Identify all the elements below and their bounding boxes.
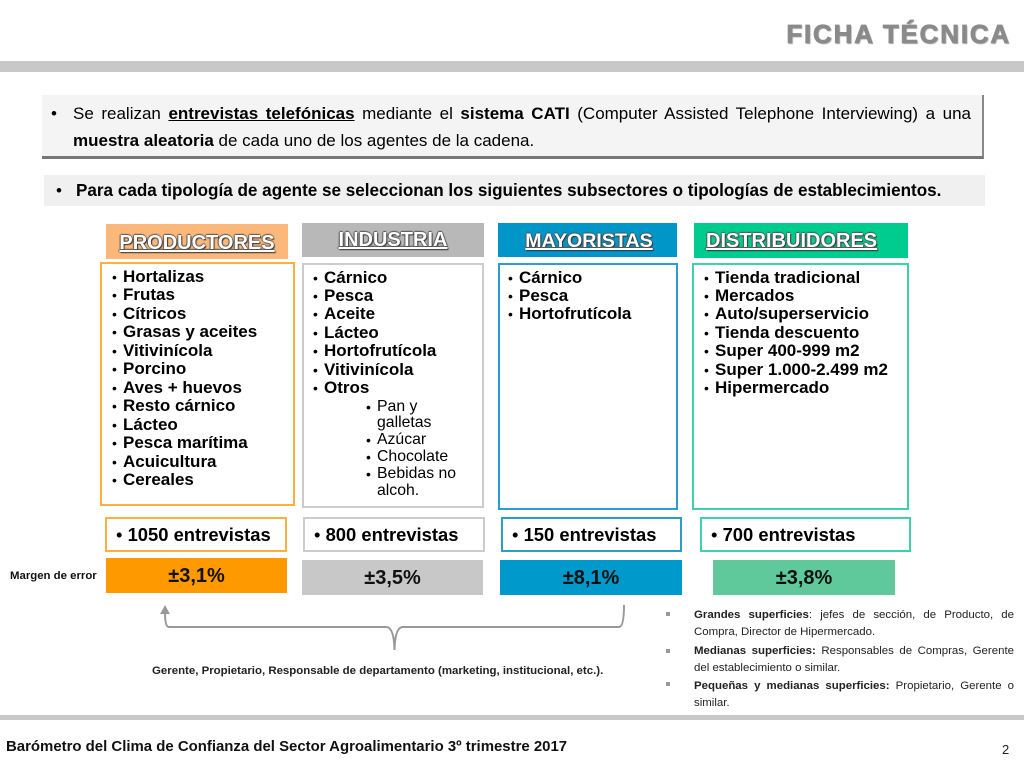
margin: mayoristas: ±8,1% <box>563 567 619 589</box>
note text: Para cada tipología de agente se seleccionan los siguientes subsectores o tipologías de establecimientos. <box>76 181 941 200</box>
heading: mayoristas <box>498 223 677 257</box>
list: Tienda descuento <box>715 323 859 342</box>
count: distribuidores <box>700 517 911 552</box>
list: Hortofrutícola <box>324 341 436 360</box>
heading: distribuidores <box>694 223 908 258</box>
caption: respondents: Gerente, Propietario, Responsable de departamento (marketing, institucional, etc.). <box>152 665 603 677</box>
panel: method description <box>42 95 984 159</box>
item 3: Pequeñas y medianas superficies: Propietario, Gerente o <box>694 680 1014 692</box>
list <box>704 268 888 397</box>
list: Pesca <box>519 286 568 305</box>
panel: industria list <box>302 263 484 508</box>
list: Otros <box>324 378 369 397</box>
list: Cárnico <box>324 268 387 286</box>
panel: selection note <box>44 175 985 206</box>
bullet: • <box>51 104 57 123</box>
heading: industria <box>302 223 484 257</box>
panel: mayoristas list <box>498 263 678 510</box>
heading: distribuidores: DISTRIBUIDORES <box>706 230 877 252</box>
panel: distribuidores list <box>692 263 909 510</box>
count: productores <box>105 517 287 552</box>
margin: industria: ±3,5% <box>364 567 421 589</box>
list: Vitivinícola <box>123 341 212 360</box>
heading: productores <box>106 224 288 259</box>
item 2: Medianas superficies: Responsables de Compras, Gerente <box>694 645 1014 657</box>
list: Acuicultura <box>123 452 217 471</box>
margin: distribuidores <box>713 560 895 595</box>
footer bar <box>0 715 1024 720</box>
margin: productores: ±3,1% <box>168 565 225 587</box>
heading: mayoristas: MAYORISTAS <box>525 230 653 252</box>
margin: industria <box>302 560 483 595</box>
list: Aceite <box>324 304 375 323</box>
list: Mercados <box>715 286 794 305</box>
list: Cítricos <box>123 304 186 323</box>
list: Cárnico <box>519 268 582 286</box>
list: Hortofrutícola <box>519 304 631 323</box>
list: Pesca marítima <box>123 433 248 452</box>
sub list: Bebidas no <box>377 465 456 482</box>
count: industria: • 800 entrevistas <box>314 524 458 545</box>
list <box>508 268 632 323</box>
page number: 2 <box>1002 742 1009 757</box>
margin: productores <box>106 558 287 593</box>
list: Resto cárnico <box>123 396 235 415</box>
header bar <box>0 61 1024 72</box>
count: mayoristas <box>501 517 682 552</box>
sub list: galletas <box>377 414 431 431</box>
list <box>112 267 257 489</box>
heading: industria: INDUSTRIA <box>339 229 447 251</box>
arrow: bracket <box>160 605 625 650</box>
line 2: muestra aleatoria de cada uno de los agentes de la cadena. <box>73 131 534 150</box>
count: productores: • 1050 entrevistas <box>116 524 271 545</box>
sub list: Pan y <box>377 398 417 414</box>
line 1: Se realizan entrevistas telefónicas mediante el sistema CATI (Computer Assisted Telephone Interviewing) a una <box>73 104 971 123</box>
panel: productores list <box>100 262 295 506</box>
list: Aves + huevos <box>123 378 242 397</box>
sub list <box>366 398 456 499</box>
sub list: alcoh. <box>377 482 419 499</box>
item 3 line 2: similar. <box>694 697 730 709</box>
list: Vitivinícola <box>324 360 413 379</box>
count: industria <box>303 517 485 552</box>
list: Hortalizas <box>123 267 204 286</box>
list <box>314 268 436 397</box>
count: distribuidores: • 700 entrevistas <box>711 524 855 545</box>
list: Auto/superservicio <box>715 304 869 323</box>
count: mayoristas: • 150 entrevistas <box>512 524 656 545</box>
list: Porcino <box>123 359 186 378</box>
list: Grasas y aceites <box>123 322 257 341</box>
heading: productores: PRODUCTORES <box>119 232 275 254</box>
text block: respondent types <box>666 609 1014 709</box>
list: Lácteo <box>324 323 379 342</box>
footer title: Barómetro del Clima de Confianza del Sector Agroalimentario 3º trimestre 2017 <box>6 738 567 755</box>
list: Tienda tradicional <box>715 268 860 286</box>
list: Pesca <box>324 286 373 305</box>
bullet 1 <box>666 612 670 616</box>
list: Super 1.000-2.499 m2 <box>715 360 888 379</box>
list: Hipermercado <box>715 378 829 397</box>
bullet: • <box>56 181 62 200</box>
sub list: Azúcar <box>377 431 426 448</box>
list: Super 400-999 m2 <box>715 341 860 360</box>
bullet 3 <box>666 682 670 686</box>
item 1: Grandes superficies: jefes de sección, de Producto, de <box>694 609 1014 621</box>
item 1 line 2: Compra, Director de Hipermercado. <box>694 626 875 638</box>
item 2 line 2: del establecimiento o similar. <box>694 662 840 674</box>
list: Cereales <box>123 470 194 489</box>
sub list: Chocolate <box>377 448 448 465</box>
label: margen de error: Margen de error <box>10 570 97 582</box>
margin: distribuidores: ±3,8% <box>776 567 832 589</box>
margin: mayoristas <box>500 560 682 595</box>
list: Lácteo <box>123 415 178 434</box>
list: Frutas <box>123 285 175 304</box>
title: FICHA TÉCNICA <box>786 19 1011 49</box>
bullet 2 <box>666 649 670 653</box>
